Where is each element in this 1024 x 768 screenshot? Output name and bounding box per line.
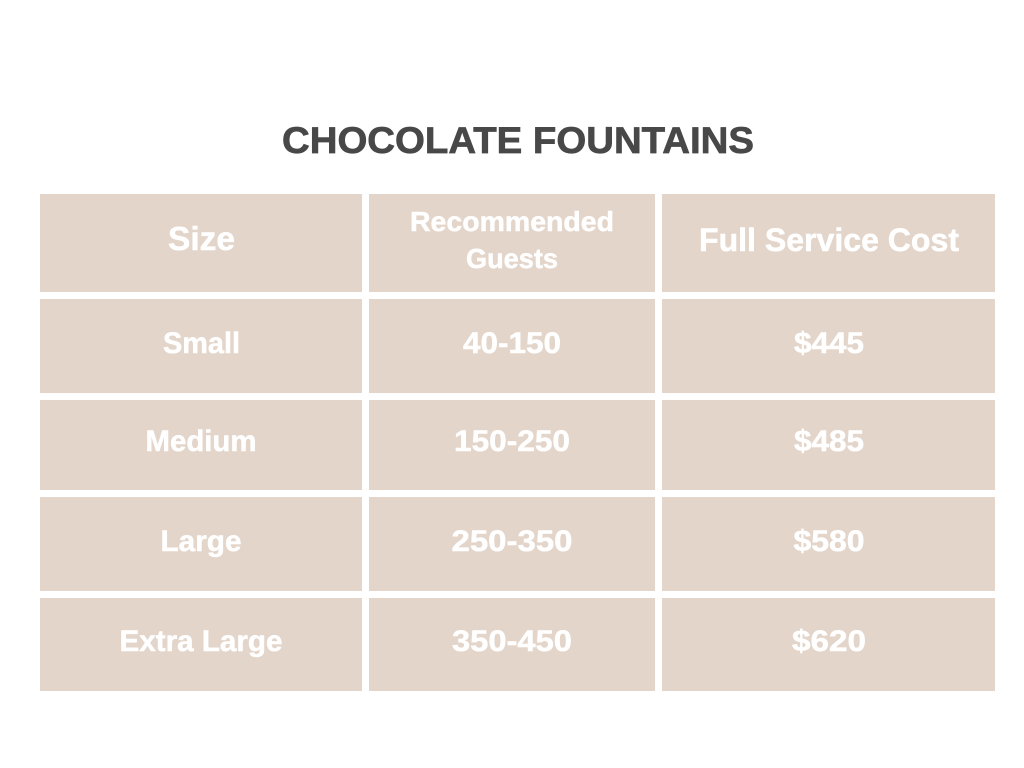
row: medium: Medium (146, 425, 256, 458)
row: large (40, 497, 995, 591)
row: small: 40-150 (463, 327, 561, 360)
row: extra large: 350-450 (452, 625, 572, 658)
row: extra large (40, 598, 995, 691)
row: large: Large (160, 525, 242, 558)
header cell: size (40, 194, 362, 292)
row: extra large: Extra Large (120, 625, 282, 658)
header cell: full service cost (662, 194, 995, 292)
header cell: recommended guests (369, 194, 655, 292)
header cell: size: Size (168, 220, 235, 257)
row: extra large: $620 (792, 625, 866, 658)
row: medium: $485 (794, 425, 864, 458)
title: CHOCOLATE FOUNTAINS (282, 120, 754, 161)
pricing table (40, 194, 995, 691)
row: medium (40, 400, 995, 490)
header row (40, 194, 995, 292)
header cell: full service cost: Full Service Cost (699, 222, 959, 258)
header cell: recommended guests: Guests (466, 243, 558, 274)
row: small (40, 299, 995, 393)
row: large: 250-350 (452, 525, 572, 558)
row: small: Small (163, 327, 240, 360)
row: small: $445 (794, 327, 864, 360)
row: large: $580 (794, 525, 864, 558)
header cell: recommended guests: Recommended (410, 206, 614, 237)
row: medium: 150-250 (454, 425, 570, 458)
